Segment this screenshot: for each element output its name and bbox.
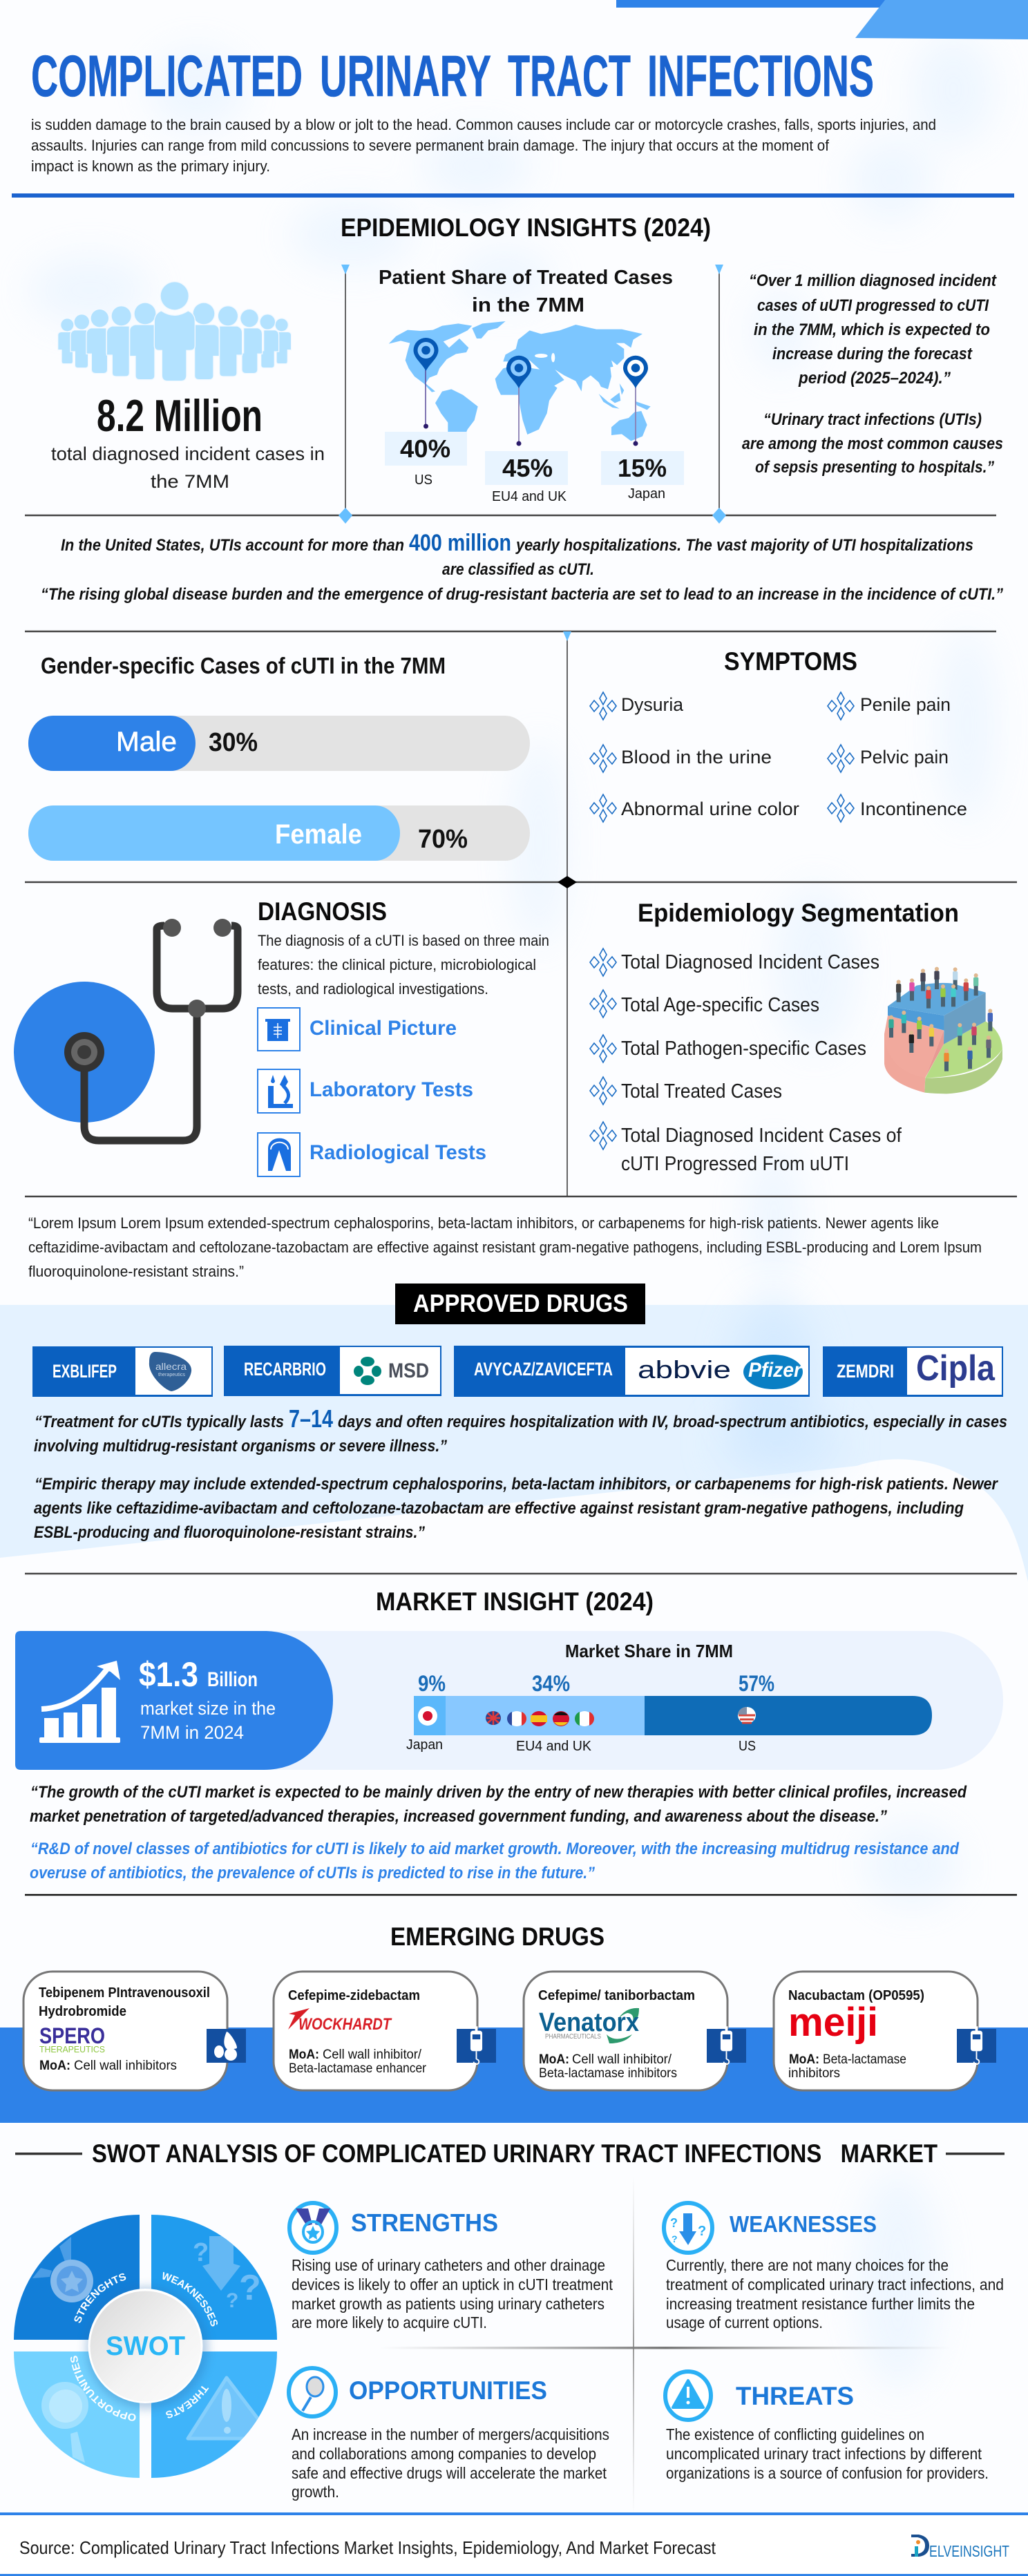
drug card: Nacubactam: inhibitors (788, 2066, 840, 2081)
panel: diagnosed incident cases (51, 282, 325, 492)
panel: strengths: STRENGTHS (351, 2208, 498, 2237)
panel: patient share map: in the 7MM (472, 294, 584, 316)
bar: male: 30% (209, 728, 258, 757)
bar: male (28, 716, 530, 771)
panel: epidemiology segmentation: Total Diagnosed Incident Cases of (621, 1125, 902, 1147)
flag: Japan (418, 1706, 437, 1726)
icon: IV bag (457, 2026, 496, 2064)
panel: epidemiology segmentation: Total Pathogen-specific Cases (621, 1038, 866, 1060)
icon: arrow watermark (193, 2236, 259, 2307)
drug card: Cefepime-zidebactam: Beta-lactamase enhancer (289, 2061, 427, 2076)
panel: patient share map: 45% (502, 454, 553, 482)
quote block: uUTI progression: cases of uUTI progressed to cUTI (757, 296, 989, 315)
panel: symptoms: SYMPTOMS (724, 647, 857, 676)
quote block: treatment duration: “Treatment for cUTIs typically lasts (35, 1413, 284, 1431)
drug card: Cefepime-zidebactam: Cell wall inhibitor/ (323, 2048, 422, 2062)
pin: US (413, 338, 438, 428)
quote block: market drivers (30, 1783, 967, 1882)
text block: therapy note: ceftazidime-avibactam and ceftolozane-tazobactam are effective against resistant gram-negative pathogens, including ESBL-producing and Lorem Ipsum (28, 1239, 982, 1256)
intro paragraph (31, 116, 936, 175)
quote block: treatment duration (34, 1404, 1007, 1542)
drug card: Exblifep: EXBLIFEP (53, 1361, 117, 1382)
flag: Germany (553, 1711, 569, 1726)
title: URINARY (320, 44, 491, 108)
heading: approved drugs (395, 1284, 645, 1324)
panel: opportunities: safe and effective drugs will accelerate the market (292, 2464, 607, 2482)
panel: patient share map: 15% (618, 454, 667, 482)
callout: US hospitalizations: yearly hospitalizations. The vast majority of UTI hospitalizations (515, 536, 973, 555)
quote block: uUTI progression: of sepsis presenting to hospitals.” (755, 458, 994, 477)
quote block: uUTI progression (742, 271, 1003, 477)
drug card: Recarbrio (224, 1346, 441, 1396)
panel: strengths: devices is likely to offer an uptick in cUTI treatment (292, 2276, 613, 2293)
icon: warning watermark (188, 2378, 273, 2439)
panel: strengths: Rising use of urinary catheters and other drainage (292, 2256, 605, 2274)
panel: threats: The existence of conflicting guidelines on (666, 2425, 924, 2443)
chart: market share bar: Market Share in 7MM (565, 1641, 733, 1661)
panel: diagnosis (258, 897, 549, 1176)
text block: therapy note (28, 1214, 982, 1280)
chart: market share bar: US (739, 1739, 756, 1754)
panel: diagnosed incident cases: total diagnosed incident cases in (51, 443, 325, 464)
callout: US hospitalizations (41, 530, 1003, 604)
panel: symptoms: Pelvic pain (860, 747, 949, 767)
icon: arrow watermark: ? (193, 2238, 209, 2267)
quote block: uUTI progression: “Over 1 million diagnosed incident (749, 271, 997, 290)
panel: market insight: $1.3 (139, 1655, 198, 1694)
quote block: uUTI progression: in the 7MM, which is expected to (754, 321, 990, 339)
panel: patient share map: Japan (628, 486, 665, 502)
panel: weaknesses: Currently, there are not many choices for the (666, 2256, 949, 2274)
drug card: Tebipenem (23, 1972, 246, 2090)
text block: therapy note: “Lorem Ipsum Lorem Ipsum extended-spectrum cephalosporins, beta-lactam inhibitors, or carbapenems for high-risk patients. Newer agents like (28, 1214, 939, 1232)
chart: market share bar: EU4 and UK (516, 1739, 592, 1754)
panel: epidemiology segmentation: Total Age-specific Cases (621, 994, 819, 1016)
pin: EU4 and UK (506, 356, 531, 446)
footer band (0, 2512, 1028, 2576)
drug card: Cefepime-zidebactam: MoA: (289, 2048, 319, 2062)
panel: weaknesses: treatment of complicated urinary tract infections, and (666, 2276, 1004, 2293)
panel: threats: uncomplicated urinary tract infections by different (666, 2445, 982, 2463)
drug card: Recarbrio: RECARBRIO (244, 1359, 326, 1380)
drug card: Exblifep (32, 1346, 213, 1397)
icon: pills (207, 2029, 246, 2063)
panel: epidemiology segmentation: Epidemiology Segmentation (638, 899, 959, 927)
drug card: Cefepime/taniborbactam: MoA: (539, 2052, 569, 2067)
icon: down arrow with question marks (664, 2203, 712, 2253)
chart: market share bar: 57% (739, 1671, 774, 1696)
SWOT centre disc (86, 2287, 208, 2409)
drug card: Avycaz/Zavicefta: abbvie (638, 1355, 731, 1384)
quote block: treatment duration: involving multidrug-resistant organisms or severe illness.” (34, 1437, 447, 1456)
intro paragraph: impact is known as the primary injury. (31, 158, 270, 175)
panel: epidemiology segmentation (590, 899, 1002, 1175)
icon: IV bag (957, 2026, 996, 2064)
drug card: Zemdri: ZEMDRI (837, 1361, 894, 1382)
panel: epidemiology segmentation: Total Treated Cases (621, 1080, 782, 1103)
background band: approved drugs (0, 1299, 1028, 1582)
quote block: uUTI progression: are among the most common causes (742, 435, 1003, 453)
panel: opportunities: An increase in the number of mergers/acquisitions (292, 2425, 609, 2443)
drug card: Tebipenem: Cell wall inhibitors (74, 2059, 177, 2073)
quote block: market drivers: “R&D of novel classes of antibiotics for cUTI is likely to aid market growth. Moreover, with the increasing multidrug resistance and (30, 1840, 960, 1858)
intro paragraph: is sudden damage to the brain caused by a blow or jolt to the head. Common causes include car or motorcycle crashes, falls, sports injuries, and (31, 116, 936, 133)
bar: female (28, 805, 530, 861)
panel: weaknesses (664, 2203, 1004, 2331)
chart: market share bar: 9% (418, 1671, 446, 1696)
panel: gender-specific cases (28, 653, 530, 861)
drug card: Tebipenem: SPERO (39, 2023, 105, 2048)
drug card: Avycaz/Zavicefta (454, 1346, 810, 1397)
flag: UK (486, 1711, 501, 1725)
title: INFECTIONS (647, 44, 874, 108)
drug card: Tebipenem: MoA: (39, 2059, 70, 2073)
drug card: Avycaz/Zavicefta: AVYCAZ/ZAVICEFTA (474, 1359, 613, 1380)
icon: stethoscope (14, 919, 238, 1141)
icon: medal (289, 2203, 336, 2253)
drug card: Recarbrio: MSD (388, 1359, 429, 1382)
drug card: Tebipenem: THERAPEUTICS (39, 2044, 105, 2054)
quote block: market drivers: market penetration of targeted/advanced therapies, increased government funding, and awareness about the disease.” (30, 1807, 887, 1826)
icon: growth chart (39, 1661, 120, 1743)
panel: patient share map: Patient Share of Treated Cases (379, 267, 673, 289)
quote block: uUTI progression: increase during the forecast (772, 345, 973, 363)
panel: patient share map: EU4 and UK (492, 489, 567, 504)
icon: IV bag (707, 2026, 746, 2064)
panel: weaknesses: increasing treatment resistance further limits the (666, 2295, 975, 2313)
chart: market share bar (406, 1641, 932, 1754)
icon: magnifier (289, 2368, 336, 2416)
callout: US hospitalizations: are classified as cUTI. (442, 560, 594, 579)
world map (389, 321, 651, 441)
panel: epidemiology segmentation: cUTI Progressed From uUTI (621, 1153, 849, 1175)
panel: diagnosis: The diagnosis of a cUTI is based on three main (258, 932, 549, 949)
panel: opportunities: OPPORTUNITIES (349, 2376, 547, 2405)
heading: SWOT analysis: SWOT ANALYSIS OF COMPLICATED URINARY TRACT INFECTIONS MARKET (92, 2139, 937, 2168)
panel: threats: organizations is a source of confusion for providers. (666, 2464, 989, 2482)
panel: opportunities: and collaborations among companies to develop (292, 2445, 596, 2463)
heading: emerging drugs: EMERGING DRUGS (390, 1923, 605, 1951)
quote block: uUTI progression: “Urinary tract infections (UTIs) (763, 410, 982, 429)
panel: epidemiology segmentation: Total Diagnosed Incident Cases (621, 951, 879, 973)
panel: market insight: market size in the (140, 1698, 276, 1719)
panel: diagnosis: tests, and radiological investigations. (258, 980, 488, 998)
panel: weaknesses: WEAKNESSES (730, 2211, 877, 2237)
panel: symptoms: Blood in the urine (621, 747, 772, 767)
icon: laboratory tests (258, 1069, 300, 1113)
drug card: Nacubactam: Nacubactam (OP0595) (788, 1988, 924, 2003)
panel: strengths (289, 2203, 613, 2331)
header corner shapes (616, 0, 1028, 39)
icon: radiological tests (258, 1133, 300, 1176)
drug card: Cefepime/taniborbactam: Beta-lactamase inhibitors (539, 2066, 677, 2081)
drug card: Cefepime-zidebactam: WOCKHARDT (298, 2015, 392, 2034)
icon: crowd of people (58, 282, 291, 381)
panel: diagnosis: Laboratory Tests (310, 1078, 473, 1101)
panel: diagnosed incident cases: the 7MM (151, 471, 229, 492)
icon: medal watermark (32, 2237, 93, 2302)
title: TRACT (508, 44, 631, 108)
panel: patient share map: 40% (400, 435, 450, 463)
SWOT wheel (14, 2215, 277, 2478)
heading: approved drugs: APPROVED DRUGS (413, 1289, 628, 1317)
title (31, 44, 874, 108)
heading: epidemiology insights: EPIDEMIOLOGY INSIGHTS (2024) (341, 213, 711, 242)
icon: pie chart with people (884, 967, 1002, 1094)
drug card: Zemdri: Cipla (916, 1348, 996, 1389)
heading: market insight: MARKET INSIGHT (2024) (376, 1587, 654, 1616)
text block: therapy note: fluoroquinolone-resistant strains.” (28, 1263, 244, 1280)
icon: arrow watermark: ? (239, 2268, 261, 2308)
callout: US hospitalizations: In the United States, UTIs account for more than (61, 536, 404, 555)
percentage boxes (385, 432, 684, 485)
callout: US hospitalizations: 400 million (409, 530, 511, 556)
drug card: Nacubactam: MoA: (789, 2052, 819, 2067)
bar: female: 70% (418, 825, 468, 854)
label: strengths: STRENGHTS (75, 2273, 126, 2323)
drug card: Cefepime/taniborbactam: Cell wall inhibitor/ (572, 2052, 672, 2067)
panel: opportunities (289, 2368, 609, 2501)
drug card: Exblifep: therapeutics (158, 1373, 186, 1377)
panel: diagnosis: features: the clinical picture, microbiological (258, 956, 536, 973)
icon: down arrow with question marks: ? (698, 2224, 706, 2239)
quote block: uUTI progression: period (2025–2024).” (798, 369, 951, 388)
label: weaknesses: WEAKNESSES (163, 2271, 218, 2327)
panel: strengths: market growth as patients using urinary catheters (292, 2295, 605, 2313)
icon: warning triangle (665, 2372, 711, 2420)
icon: magnifier watermark (41, 2382, 88, 2463)
background band: emerging drugs (0, 2028, 1028, 2123)
quote block: treatment duration: agents like ceftazidime-avibactam and ceftolozane-tazobactam are effective against resistant gram-negative pathogens, including (34, 1499, 964, 1518)
panel: threats (665, 2372, 989, 2482)
icon: clinical picture (258, 1008, 300, 1051)
panel: opportunities: growth. (292, 2483, 339, 2501)
drug card: Nacubactam (774, 1972, 996, 2090)
icon: down arrow with question marks: ? (672, 2233, 678, 2244)
panel: diagnosis: Radiological Tests (310, 1141, 486, 1164)
panel: gender-specific cases: Gender-specific Cases of cUTI in the 7MM (41, 653, 446, 678)
title: COMPLICATED (31, 44, 303, 108)
bar: female: Female (275, 819, 362, 850)
panel: threats: THREATS (736, 2382, 854, 2410)
drug card: Cefepime-zidebactam: Cefepime-zidebactam (288, 1988, 420, 2003)
quote block: treatment duration: ESBL-producing and fluoroquinolone-resistant strains.” (34, 1523, 425, 1542)
drug card: Cefepime-zidebactam (274, 1972, 496, 2090)
chart: market share bar: Japan (406, 1737, 443, 1753)
label: opportunities: OPPORTUNITIES (70, 2356, 135, 2421)
label: threats: THREATS (166, 2386, 209, 2418)
pin: Japan (623, 356, 648, 446)
SWOT centre disc: SWOT (106, 2331, 185, 2361)
panel: market insight: 7MM in 2024 (140, 1722, 244, 1743)
quote block: market drivers: overuse of antibiotics, the prevalence of cUTIs is predicted to rise in the future.” (30, 1864, 595, 1882)
panel: diagnosis: Clinical Picture (310, 1017, 457, 1040)
drug card: Nacubactam: meiji (788, 2000, 878, 2045)
flag: Spain (531, 1711, 547, 1726)
panel: symptoms: Incontinence (860, 799, 967, 819)
panel: symptoms (590, 647, 967, 822)
drug card: Cefepime/taniborbactam: PHARMACEUTICALS (545, 2033, 601, 2041)
drug card: Nacubactam: Beta-lactamase (823, 2052, 906, 2067)
quote block: treatment duration: 7–14 (289, 1404, 333, 1433)
panel: market insight (15, 1631, 1003, 1770)
flag: US (738, 1707, 756, 1724)
panel: patient share map: US (415, 473, 432, 488)
flag: Italy (575, 1711, 594, 1726)
drug card: Avycaz/Zavicefta: Pfizer (748, 1359, 803, 1382)
panel: weaknesses: usage of current options. (666, 2313, 823, 2331)
icon: down arrow with question marks: ? (670, 2216, 678, 2230)
panel: symptoms: Abnormal urine color (621, 799, 799, 819)
panel: symptoms: Penile pain (860, 694, 951, 715)
bar: male: Male (116, 727, 177, 757)
drug card: Exblifep: allecra (155, 1361, 187, 1372)
panel: diagnosis: DIAGNOSIS (258, 897, 387, 926)
source note: Source: Complicated Urinary Tract Infections Market Insights, Epidemiology, And Market Forecast (19, 2537, 716, 2558)
drug card: Zemdri (823, 1346, 1003, 1397)
drug card: Tebipenem: Hydrobromide (39, 2004, 126, 2019)
panel: symptoms: Dysuria (621, 694, 684, 715)
flag: France (507, 1711, 526, 1726)
icon: arrow watermark: ? (226, 2289, 238, 2312)
panel: strengths: are more likely to acquire cUTI. (292, 2313, 487, 2331)
drug card: Cefepime/taniborbactam: Venatorx (539, 2008, 639, 2037)
chart: market share bar: 34% (532, 1671, 570, 1696)
intro paragraph: assaults. Injuries can range from mild concussions to severe permanent brain damage. The injury that occurs at the moment of (31, 137, 830, 154)
drug card: Tebipenem: Tebipenem PIntravenousoxil (39, 1985, 210, 2001)
drug card: Cefepime/taniborbactam (524, 1972, 746, 2090)
panel: diagnosed incident cases: 8.2 Million (97, 390, 263, 441)
logo: DelveInsight (911, 2535, 1009, 2560)
drug card: Cefepime/taniborbactam: Cefepime/ taniborbactam (538, 1988, 695, 2003)
panel: patient share map (379, 267, 684, 504)
panel: market insight: Billion (207, 1668, 258, 1691)
